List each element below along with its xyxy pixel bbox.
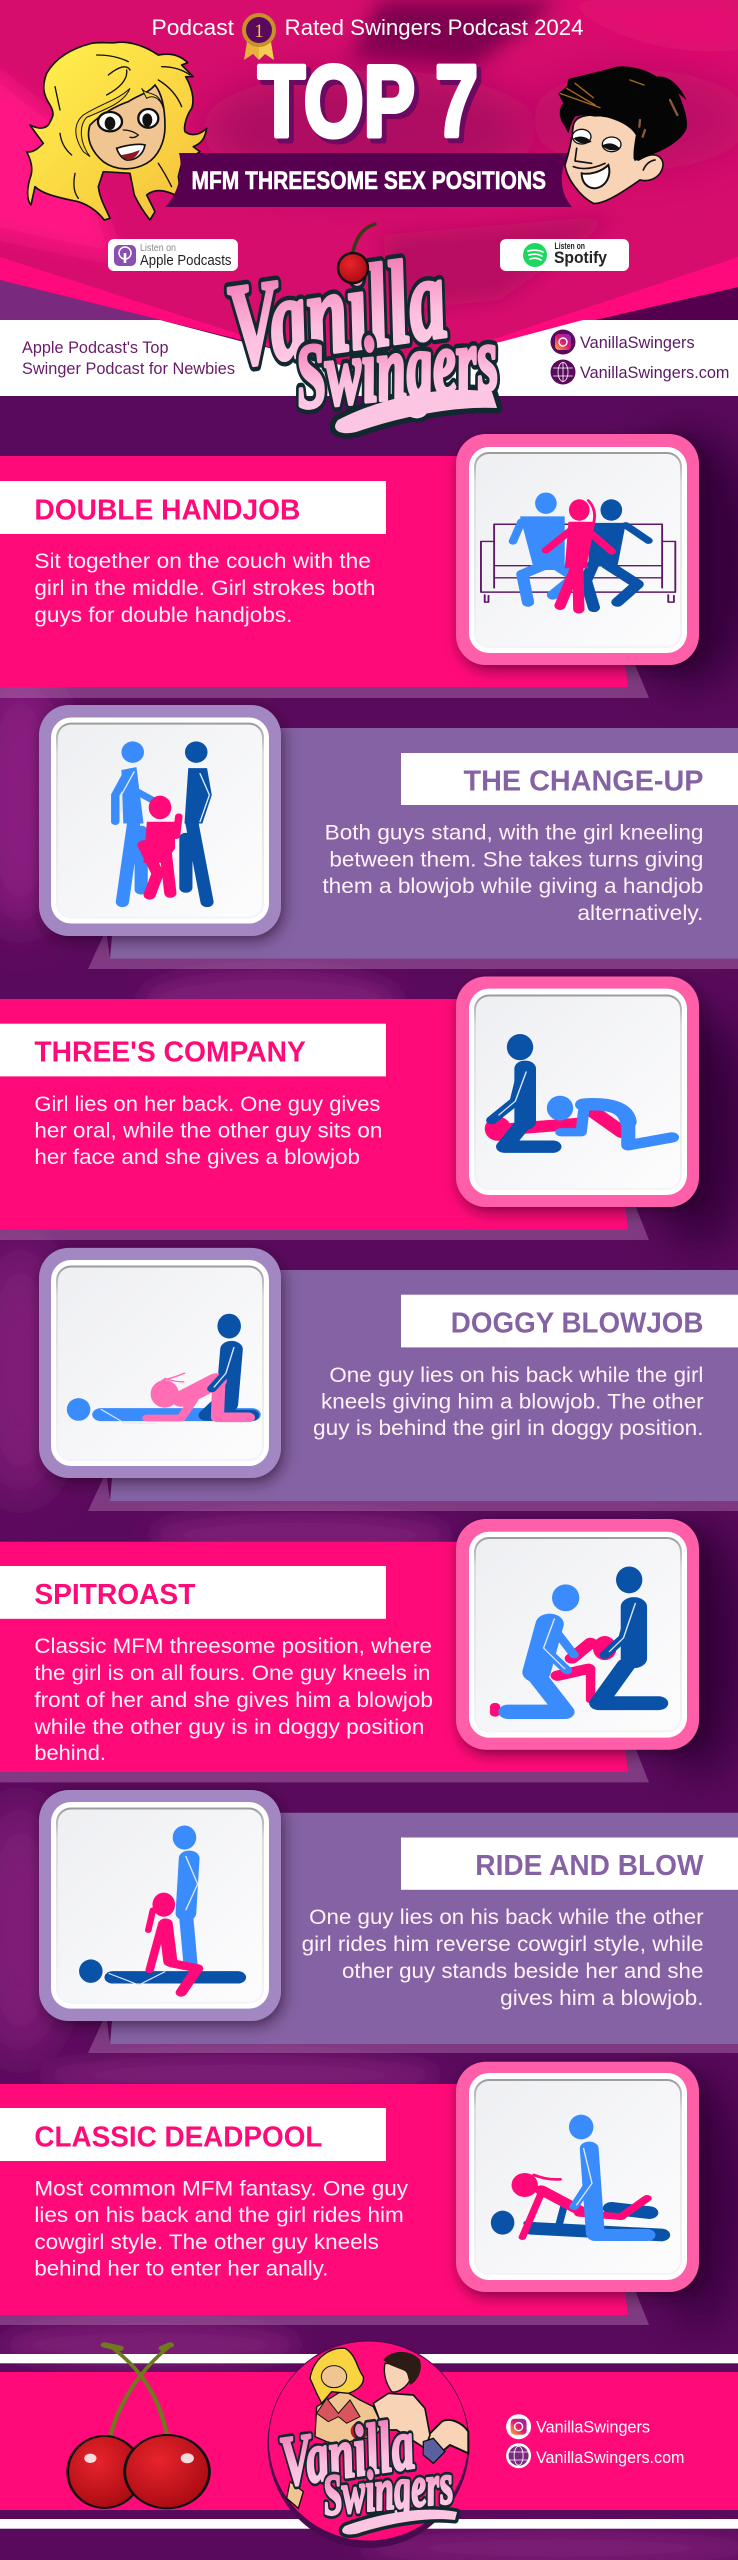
card: couch illustration (456, 434, 699, 665)
icon: cherries (68, 2345, 209, 2508)
heading (0, 1566, 386, 1619)
card: illustration (39, 1790, 281, 2021)
text block: guy is behind the girl in doggy position. (313, 1416, 704, 1440)
icon: instagram (550, 330, 576, 354)
text block: Sit together on the couch with the (34, 549, 371, 573)
text block: behind. (34, 1741, 106, 1765)
heading (0, 1024, 386, 1076)
footer logo badge: Vanilla (275, 2404, 419, 2502)
promo line with medal: Rated Swingers Podcast 2024 (285, 15, 584, 40)
text block: while the other guy is in doggy position (33, 1715, 424, 1739)
text block: girl rides him reverse cowgirl style, while (302, 1932, 704, 1956)
text block (322, 821, 704, 925)
header social links: VanillaSwingers (580, 333, 695, 352)
text block: other guy stands beside her and she (342, 1959, 703, 1983)
badge: apple podcasts: Listen on (140, 243, 176, 254)
text block: lies on his back and the girl rides him (34, 2203, 404, 2227)
heading: SPITROAST (34, 1579, 196, 1611)
card: illustration (456, 976, 699, 1207)
badge: spotify: Spotify (554, 248, 608, 267)
heading: DOGGY BLOWJOB (451, 1308, 704, 1340)
title: top 7: TOP 7 (262, 50, 482, 162)
text block: gives him a blowjob. (500, 1986, 704, 2010)
panel: classic deadpool (0, 2062, 699, 2325)
tagline (22, 338, 235, 378)
text block: guys for double handjobs. (34, 603, 292, 627)
text block (34, 1092, 382, 1169)
icon: globe (506, 2443, 531, 2468)
footer (0, 2340, 738, 2548)
badge: spotify (500, 239, 629, 271)
text block (302, 1905, 704, 2010)
icon: spotify (523, 243, 547, 267)
footer social links: VanillaSwingers (536, 2418, 650, 2437)
main logo: vanilla swingers with cherry: Vanilla (219, 232, 453, 392)
header social links (550, 330, 729, 384)
text block: Both guys stand, with the girl kneeling (325, 821, 704, 845)
text block: behind her to enter her anally. (34, 2257, 328, 2281)
badge: spotify: Listen on (554, 241, 585, 251)
text block: between them. She takes turns giving (329, 847, 703, 871)
heading: THE CHANGE-UP (464, 766, 704, 798)
panel: double handjob (0, 434, 699, 698)
cartoon: blonde woman head (27, 42, 207, 220)
heading: RIDE AND BLOW (475, 1850, 704, 1882)
panel: doggy blowjob (39, 1248, 738, 1511)
text block: cowgirl style. The other guy kneels (34, 2230, 379, 2254)
text block (33, 1634, 433, 1765)
main logo: vanilla swingers with cherry: Swingers (291, 307, 502, 428)
text block: Girl lies on her back. One guy gives (34, 1092, 380, 1116)
panel: ride and blow (39, 1790, 738, 2053)
footer logo badge (268, 2340, 470, 2548)
heading: THREE'S COMPANY (34, 1037, 306, 1069)
text block: the girl is on all fours. One guy kneels in (34, 1661, 430, 1685)
text block (34, 549, 375, 627)
text block (34, 2177, 408, 2281)
text block: Most common MFM fantasy. One guy (34, 2177, 408, 2201)
icon: apple podcasts (114, 245, 136, 266)
heading (401, 1838, 738, 1890)
text block: Classic MFM threesome position, where (34, 1634, 432, 1658)
footer social links: VanillaSwingers.com (536, 2448, 684, 2467)
text block: her oral, while the other guy sits on (34, 1118, 382, 1142)
tagline: Swinger Podcast for Newbies (22, 359, 235, 378)
heading (401, 753, 738, 805)
main logo: vanilla swingers with cherry: Swingers (291, 307, 502, 428)
icon: globe (550, 360, 576, 384)
header social links: VanillaSwingers.com (580, 363, 729, 382)
badge: apple podcasts: Apple Podcasts (140, 252, 232, 269)
panel: three's company (0, 976, 699, 1240)
title: top 7: TOP 7 (258, 46, 478, 158)
footer social links (506, 2414, 684, 2468)
text block: front of her and she gives him a blowjob (34, 1688, 433, 1712)
promo line with medal (152, 13, 584, 60)
text block: them a blowjob while giving a handjob (322, 874, 703, 898)
main logo: vanilla swingers with cherry (219, 224, 502, 433)
heading: CLASSIC DEADPOOL (34, 2122, 322, 2154)
icon: instagram (506, 2414, 531, 2439)
text block: One guy lies on his back while the girl (329, 1363, 703, 1387)
icon: number one medal: 1 (254, 21, 264, 42)
badge: apple podcasts (108, 239, 238, 271)
heading: DOUBLE HANDJOB (34, 494, 300, 526)
card: illustration (39, 1248, 281, 1478)
tagline: Apple Podcast's Top (22, 338, 168, 357)
icon: number one medal (242, 13, 276, 60)
footer logo badge: Swingers (320, 2451, 456, 2528)
card: illustration (456, 1519, 699, 1750)
text block: girl in the middle. Girl strokes both (34, 576, 375, 600)
subtitle banner: MFM THREESOME SEX POSITIONS (192, 167, 546, 195)
footer logo badge: Swingers (320, 2451, 456, 2528)
heading (401, 1295, 738, 1347)
cartoon: dark-haired man head (558, 66, 687, 203)
panel: the change-up (39, 705, 738, 969)
footer logo badge: Vanilla (275, 2404, 419, 2502)
heading (0, 2108, 386, 2161)
card: standing illustration (39, 705, 281, 936)
text block: her face and she gives a blowjob (34, 1145, 360, 1169)
subtitle banner (165, 153, 572, 207)
text block (313, 1363, 704, 1440)
icon: cherry (338, 224, 375, 283)
text block: One guy lies on his back while the other (309, 1905, 704, 1929)
promo line with medal: Podcast (152, 15, 234, 40)
text block: kneels giving him a blowjob. The other (321, 1390, 704, 1414)
header white band (0, 320, 738, 396)
heading (0, 481, 386, 534)
header pink silk background (0, 0, 738, 380)
main logo: vanilla swingers with cherry: Vanilla (219, 232, 453, 392)
card: illustration (456, 2062, 699, 2292)
text block: alternatively. (577, 901, 703, 925)
panel: spitroast (0, 1519, 699, 1782)
